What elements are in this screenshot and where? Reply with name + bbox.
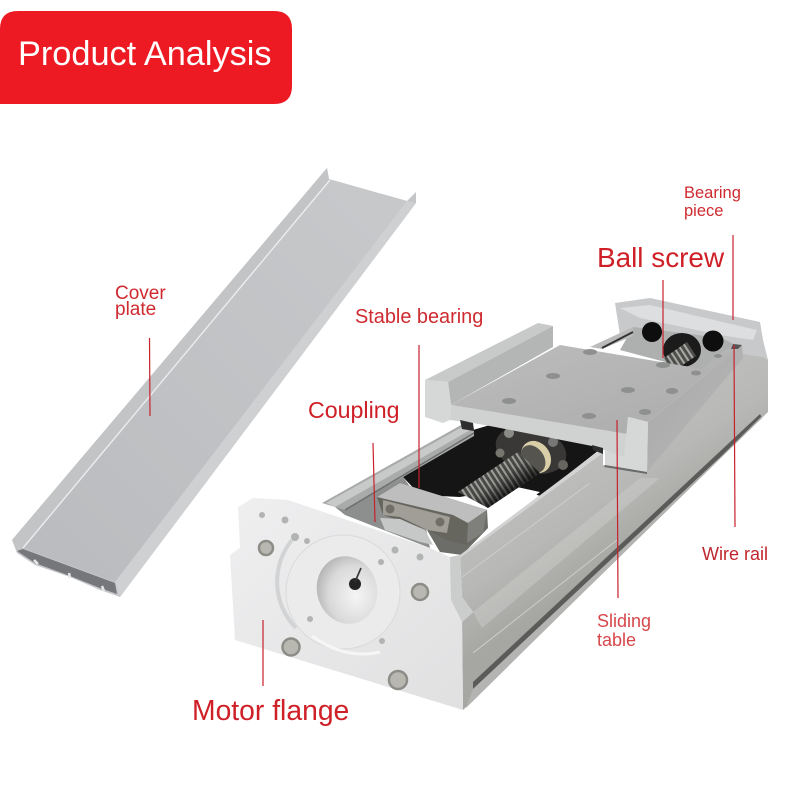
linear module assembly [230, 298, 768, 710]
sliding table mounting holes [502, 349, 722, 419]
sliding table right block [605, 417, 648, 472]
label: sliding table: Sliding [597, 611, 651, 631]
motor flange plate [230, 498, 473, 710]
label: coupling: Coupling [308, 397, 400, 423]
body highlight band [473, 478, 660, 628]
left carriage wing [425, 323, 553, 423]
rear rail [590, 327, 633, 349]
white slot under the ball screw [488, 487, 540, 530]
rail tips under table [460, 420, 603, 454]
ball nut collar [515, 435, 557, 479]
body groove [473, 414, 762, 689]
left lip [12, 168, 329, 548]
flange coupling disc [380, 518, 433, 545]
label: ball screw: Ball screw [597, 242, 725, 273]
cover plate [12, 168, 416, 597]
leader lines [150, 235, 735, 686]
shaft hole [349, 578, 361, 590]
label: bearing piece: piece [684, 202, 723, 220]
flange small holes [259, 512, 424, 644]
flange recess shadow [277, 540, 296, 628]
sliding table front face [450, 405, 627, 458]
label: cover plate: Cover [115, 283, 166, 304]
label: stable bearing: Stable bearing [355, 306, 483, 328]
flange bore [309, 549, 385, 631]
right lip [115, 201, 416, 597]
ball nut flange [490, 418, 572, 482]
label: motor flange: Motor flange [192, 694, 349, 726]
ball screw thread [458, 452, 540, 508]
rear bearing and screw [663, 333, 701, 367]
coupling block [377, 483, 488, 555]
label: cover plate: plate [115, 299, 156, 320]
label: sliding table: table [597, 630, 636, 650]
plate inner surface [23, 180, 407, 582]
flange right shoulder [450, 555, 473, 622]
left rail [322, 420, 474, 510]
right rail wall [460, 448, 603, 558]
header title: Product Analysis [18, 35, 272, 73]
label: bearing piece: Bearing [684, 184, 741, 202]
flange bolts [259, 541, 428, 689]
header banner [0, 11, 292, 104]
rear end block [590, 298, 768, 372]
plate outer silhouette [12, 168, 416, 597]
end profile [17, 549, 117, 594]
flange recess ring [286, 535, 400, 649]
sliding table top [451, 344, 742, 434]
aluminium body side [460, 354, 768, 710]
body faint lines [462, 483, 617, 653]
carriage channel [403, 425, 603, 497]
rear rail tip [731, 344, 742, 349]
rail channel floor [335, 477, 430, 548]
rear bolts [642, 322, 662, 342]
label: wire rail: Wire rail [702, 544, 768, 564]
